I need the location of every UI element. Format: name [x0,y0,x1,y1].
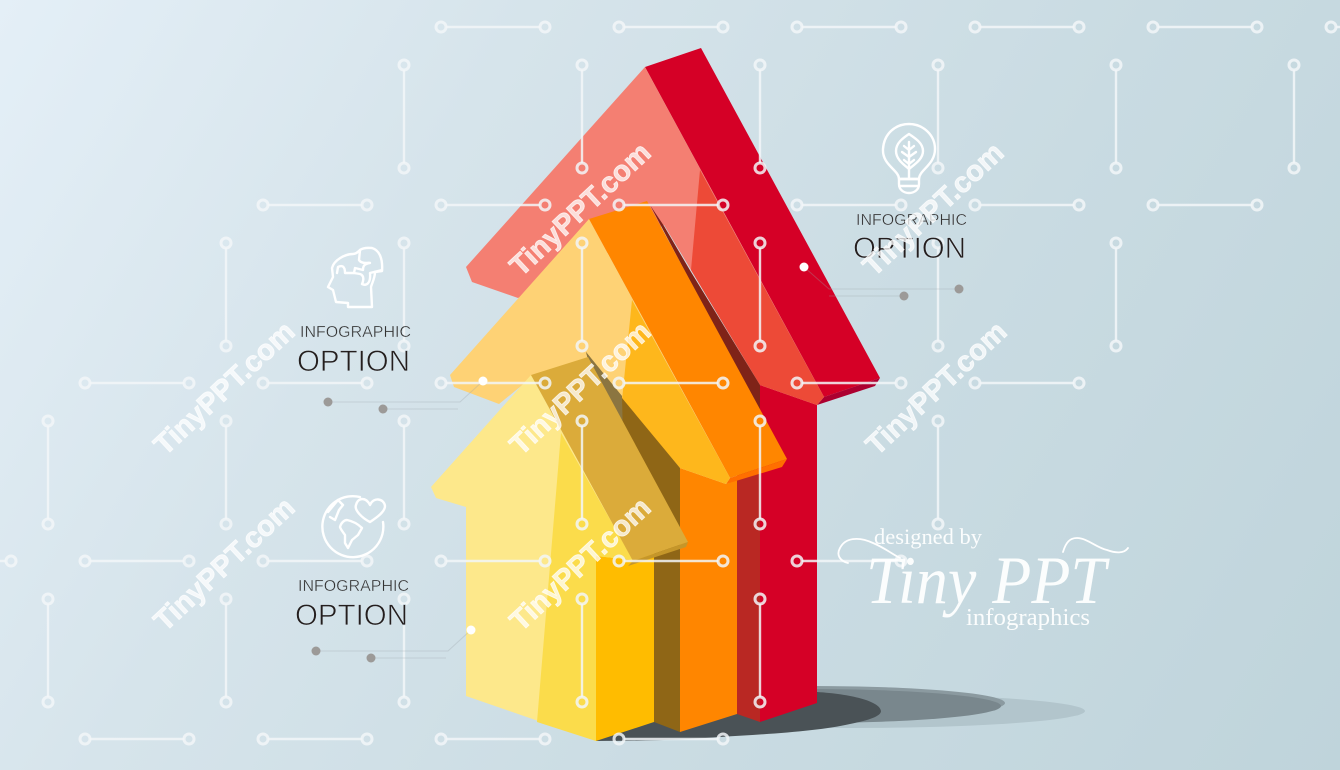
watermarks: TinyPPT.com [860,316,1013,462]
label: right option [853,212,967,265]
yellow arrow facet [537,433,633,741]
designed by logo [838,524,1128,631]
icon: puzzle head [328,248,382,307]
designed by logo: designed by [874,524,982,549]
watermarks [148,137,1013,638]
red arrow shaft side [737,385,760,722]
leader: bottom option [312,626,476,662]
label: bottom option [295,578,409,632]
yellow arrow shaft side [596,545,654,741]
red arrow head facet [691,170,824,405]
yellow arrow lower edge [628,542,688,566]
label: left option: INFOGRAPHIC [300,324,411,341]
leader: right option [800,262,964,300]
orange arrow cast shadow [586,352,680,535]
yellow arrow ridge [531,357,688,561]
orange arrow shaft side [654,468,680,732]
red arrow head face [466,67,824,405]
watermarks: TinyPPT.com [857,137,1010,283]
yellow arrow head and body face [431,375,633,741]
ground shadow [596,686,1085,741]
red arrow inner shadow [650,205,760,414]
orange arrow head face [450,219,730,484]
red arrow [466,48,880,722]
designed by logo: Tiny PPT [866,542,1110,618]
label: bottom option: OPTION [295,599,408,632]
watermarks: TinyPPT.com [504,492,657,638]
orange arrow shaft front [680,468,737,732]
watermarks: TinyPPT.com [504,316,657,462]
shadow over pale face [586,352,623,440]
label: right option: INFOGRAPHIC [856,212,967,229]
label: left option [297,324,411,378]
red arrow shaft front [760,385,817,722]
yellow arrow [431,357,688,741]
icon: lightbulb with leaf [883,124,935,193]
label: left option: OPTION [297,345,410,378]
label: bottom option: INFOGRAPHIC [298,578,409,595]
orange arrow head facet [622,300,730,484]
label: right option: OPTION [853,232,966,265]
orange arrow ridge [589,201,787,478]
orange arrow [450,201,787,732]
red arrow lower edge [817,378,880,405]
leader: left option [324,376,488,414]
watermarks: TinyPPT.com [148,316,301,462]
red arrow ridge [645,48,880,397]
orange arrow lower edge [726,459,787,484]
icon: globe with heart [322,496,385,557]
designed by logo: infographics [966,605,1090,631]
watermarks: TinyPPT.com [148,492,301,638]
watermarks: TinyPPT.com [504,137,657,283]
